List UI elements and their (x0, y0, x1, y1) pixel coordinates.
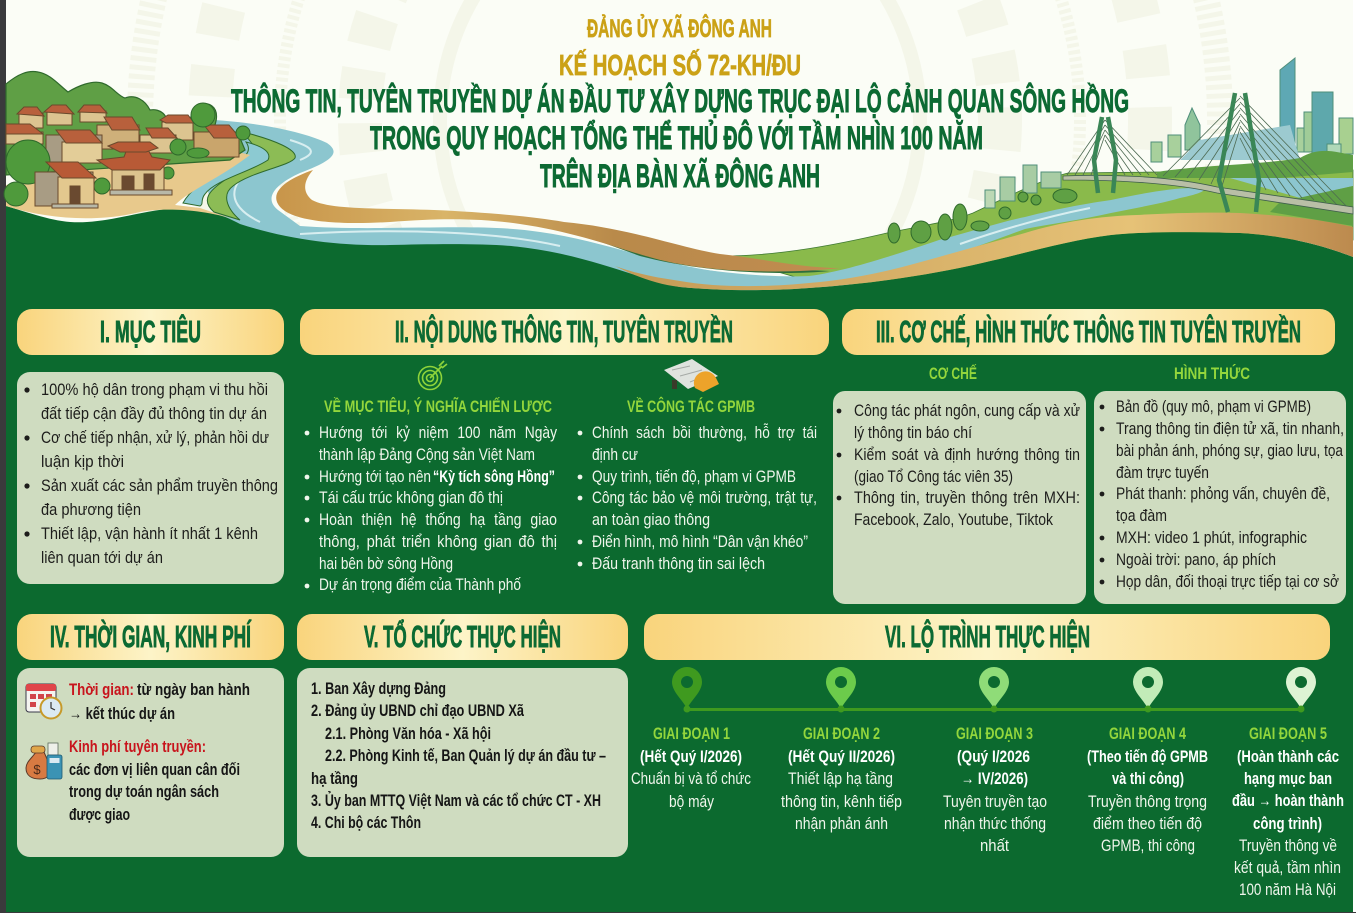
heading I: I. MỤC TIÊU (100, 313, 201, 349)
text: time: → kết thúc dự án (69, 704, 175, 723)
list I: đa phương tiện (41, 500, 141, 519)
column: site clearance: Công tác bảo vệ môi trường, trật tự, (592, 488, 817, 507)
gold ribbon lower (615, 213, 1353, 290)
heading II: II. NỘI DUNG THÔNG TIN, TUYÊN TRUYỀN (395, 313, 733, 349)
column: site clearance: định cư (592, 445, 638, 464)
green river bank (207, 132, 295, 220)
text: time: Thời gian: (69, 680, 134, 699)
stage 4: (Theo tiến độ GPMB (1087, 747, 1208, 766)
bridge cables (1067, 96, 1350, 210)
stage 3 (943, 724, 1047, 855)
column: strategic goals: Hoàn thiện hệ thống hạ tầng giao (319, 510, 557, 529)
list V: 1. Ban Xây dựng Đảng (311, 679, 446, 698)
dark wedge between ribbon and river (590, 238, 830, 273)
list V: 3. Ủy ban MTTQ Việt Nam và các tổ chức CT - XH (311, 791, 601, 810)
icon: money bag and calculator: $ (33, 762, 41, 777)
stage 4: điểm theo tiến độ (1093, 814, 1202, 833)
stage 3: nhận thức thống (944, 814, 1046, 833)
card: mechanism: Công tác phát ngôn, cung cấp và xử (854, 401, 1080, 420)
heading V (297, 614, 628, 660)
column: site clearance: VỀ CÔNG TÁC GPMB (627, 397, 755, 416)
stage 5: GIAI ĐOẠN 5 (1249, 724, 1327, 743)
card: mechanism: Thông tin, truyền thông trên MXH: (854, 488, 1080, 507)
stage 2: nhận phản ánh (795, 814, 888, 833)
header watermark: bronze drum pattern (140, 0, 1220, 660)
illustration: city skyline and bridges (888, 58, 1353, 243)
plan number: KẾ HOẠCH SỐ 72-KH/ĐU (559, 48, 801, 82)
stage 3: Tuyên truyền tạo (943, 792, 1047, 811)
column: strategic goals (305, 396, 557, 594)
trees in front (4, 103, 250, 206)
card V (297, 668, 628, 857)
list I: luận kịp thời (41, 452, 124, 471)
column: strategic goals: thông, phát triển không gian đô thị (319, 532, 557, 551)
main title (231, 83, 1129, 194)
stage 4: GIAI ĐOẠN 4 (1109, 724, 1186, 743)
gold ribbon upper (276, 170, 840, 271)
list V: 2.1. Phòng Văn hóa - Xã hội (325, 724, 491, 743)
timeline line and pins (672, 667, 1316, 712)
panel: I. Mục tiêu (17, 309, 284, 584)
stage 2 (781, 724, 902, 833)
column: strategic goals: thành lập Đảng Cộng sản Việt Nam (319, 445, 535, 464)
stage 4: và thi công) (1112, 769, 1184, 788)
stage 2: GIAI ĐOẠN 2 (803, 724, 880, 743)
stage 2: Thiết lập hạ tầng (788, 769, 893, 788)
card: mechanism: lý thông tin báo chí (854, 423, 972, 442)
bridge deck (1063, 175, 1353, 214)
column: strategic goals: Hướng tới kỷ niệm 100 năm Ngày (319, 423, 557, 442)
list I: đất tiếp cận đầy đủ thông tin dự án (41, 404, 267, 423)
main title: TRÊN ĐỊA BÀN XÃ ĐÔNG ANH (540, 158, 820, 194)
panel: III. Cơ chế, hình thức (833, 309, 1346, 604)
card: forms: đàm trực tuyến (1116, 463, 1209, 482)
bridge towers (1094, 93, 1259, 212)
text: budget: Kinh phí tuyên truyền: (69, 737, 206, 756)
column: site clearance: an toàn giao thông (592, 510, 710, 529)
heading V: V. TỔ CHỨC THỰC HIỆN (364, 618, 561, 654)
issuer line: ĐẢNG ỦY XÃ ĐÔNG ANH (587, 13, 772, 43)
column: strategic goals: hai bên bờ sông Hồng (319, 554, 453, 573)
stage 2: thông tin, kênh tiếp (781, 792, 902, 811)
stage 5: công trình) (1253, 814, 1322, 833)
stage 1: GIAI ĐOẠN 1 (653, 724, 730, 743)
list I: Sản xuất các sản phẩm truyền thông (41, 476, 278, 495)
list I: 100% hộ dân trong phạm vi thu hồi (41, 380, 268, 399)
text: budget: được giao (69, 805, 130, 824)
slope trees (888, 189, 1077, 243)
card: forms: Ngoài trời: pano, áp phích (1116, 550, 1276, 569)
list V: 4. Chi bộ các Thôn (311, 813, 421, 832)
card: mechanism (833, 391, 1086, 604)
heading II (300, 309, 829, 355)
green fill under river (6, 206, 1353, 912)
river highlights (234, 140, 1090, 246)
panel: II. Nội dung thông tin, tuyên truyền (300, 309, 829, 594)
heading III (842, 309, 1335, 355)
text: time (69, 680, 250, 723)
stage 3: → IV/2026) (961, 769, 1028, 788)
stage 4: GPMB, thi công (1101, 836, 1195, 855)
stage 3: GIAI ĐOẠN 3 (956, 724, 1033, 743)
column: strategic goals: Tái cấu trúc không gian đô thị (319, 488, 503, 507)
far green bank (1157, 151, 1353, 178)
header background (6, 0, 1353, 300)
left edge strip (0, 0, 6, 913)
list I: Cơ chế tiếp nhận, xử lý, phản hồi dư (41, 428, 269, 447)
stage 1: bộ máy (669, 792, 714, 811)
column: site clearance (578, 397, 817, 573)
icon: plans and helmet (664, 359, 719, 392)
column: strategic goals: Hướng tới tạo nên (319, 467, 431, 486)
main title: TRONG QUY HOẠCH TỔNG THỂ THỦ ĐÔ VỚI TẦM NHÌN 100 NĂM (370, 120, 983, 156)
stage 5 (1232, 724, 1344, 899)
column: strategic goals: Dự án trọng điểm của Thành phố (319, 575, 521, 594)
list I: liên quan tới dự án (41, 548, 163, 567)
stage 2: (Hết Quý II/2026) (788, 747, 895, 766)
heading IV (17, 614, 284, 660)
column: site clearance: Quy trình, tiến độ, phạm vi GPMB (592, 467, 796, 486)
stage 3: (Quý I/2026 (957, 747, 1030, 766)
stage 4 (1087, 724, 1208, 855)
panel: VI. Lộ trình thực hiện (631, 614, 1344, 899)
stage 4: Truyền thông trọng (1088, 792, 1207, 811)
card: mechanism: (giao Tổ Công tác viên 35) (854, 467, 1013, 486)
list I: Thiết lập, vận hành ít nhất 1 kênh (41, 524, 258, 543)
text: budget (69, 737, 240, 824)
column: strategic goals: VỀ MỤC TIÊU, Ý NGHĨA CHIẾN LƯỢC (324, 396, 552, 416)
card: forms: MXH: video 1 phút, infographic (1116, 528, 1307, 547)
subheading: forms: HÌNH THỨC (1174, 364, 1250, 383)
text: budget: trong dự toán ngân sách (69, 782, 219, 801)
column: site clearance: Điển hình, mô hình “Dân vận khéo” (592, 532, 808, 551)
front houses and temple (35, 142, 172, 208)
buildings (985, 58, 1353, 208)
back houses (6, 105, 240, 163)
icon: target (418, 361, 447, 390)
text: budget: các đơn vị liên quan cân đối (69, 760, 240, 779)
card: mechanism: Facebook, Zalo, Youtube, Tiktok (854, 510, 1053, 529)
stage 1: (Hết Quý I/2026) (640, 747, 742, 766)
icon: money bag and calculator (26, 743, 62, 779)
tree canopy (6, 72, 245, 175)
small stream (183, 142, 269, 206)
right bank land (723, 170, 1353, 290)
card: forms: tọa đàm (1116, 506, 1167, 525)
list V: hạ tầng (311, 769, 358, 788)
list V: 2.2. Phòng Kinh tế, Ban Quản lý dự án đầu tư – (325, 746, 606, 765)
column: strategic goals: “Kỳ tích sông Hồng” (433, 467, 555, 486)
panel: IV. Thời gian, kinh phí (17, 614, 284, 857)
card IV (17, 668, 284, 857)
text: time: từ ngày ban hành (137, 680, 250, 699)
stage 5: hạng mục ban (1244, 769, 1332, 788)
right river (640, 188, 1204, 292)
list V (311, 679, 606, 832)
icon: calendar and clock (26, 684, 62, 718)
sand ground (6, 150, 250, 220)
column: site clearance: Đấu tranh thông tin sai lệch (592, 554, 765, 573)
blue wash behind cables (1180, 125, 1300, 160)
card I (17, 372, 284, 584)
heading VI: VI. LỘ TRÌNH THỰC HIỆN (885, 618, 1090, 654)
main river (200, 120, 720, 300)
stage 1: Chuẩn bị và tổ chức (631, 769, 751, 788)
title block (231, 13, 1129, 194)
panel: V. Tổ chức thực hiện (297, 614, 628, 857)
stage 1 (631, 724, 751, 811)
list V: 2. Đảng ủy UBND chỉ đạo UBND Xã (311, 701, 524, 720)
subheading: mechanism: CƠ CHẾ (929, 364, 977, 383)
column: site clearance: Chính sách bồi thường, hỗ trợ tái (592, 423, 817, 442)
heading IV: IV. THỜI GIAN, KINH PHÍ (50, 618, 252, 654)
card: forms (1094, 391, 1346, 604)
illustration: riverside village (4, 72, 250, 220)
heading I (17, 309, 284, 355)
card: mechanism: Kiểm soát và định hướng thông tin (854, 445, 1080, 464)
heading VI (644, 614, 1330, 660)
list I (24, 380, 278, 567)
stage 3: nhất (980, 836, 1009, 855)
bottom edge line (0, 912, 1356, 913)
